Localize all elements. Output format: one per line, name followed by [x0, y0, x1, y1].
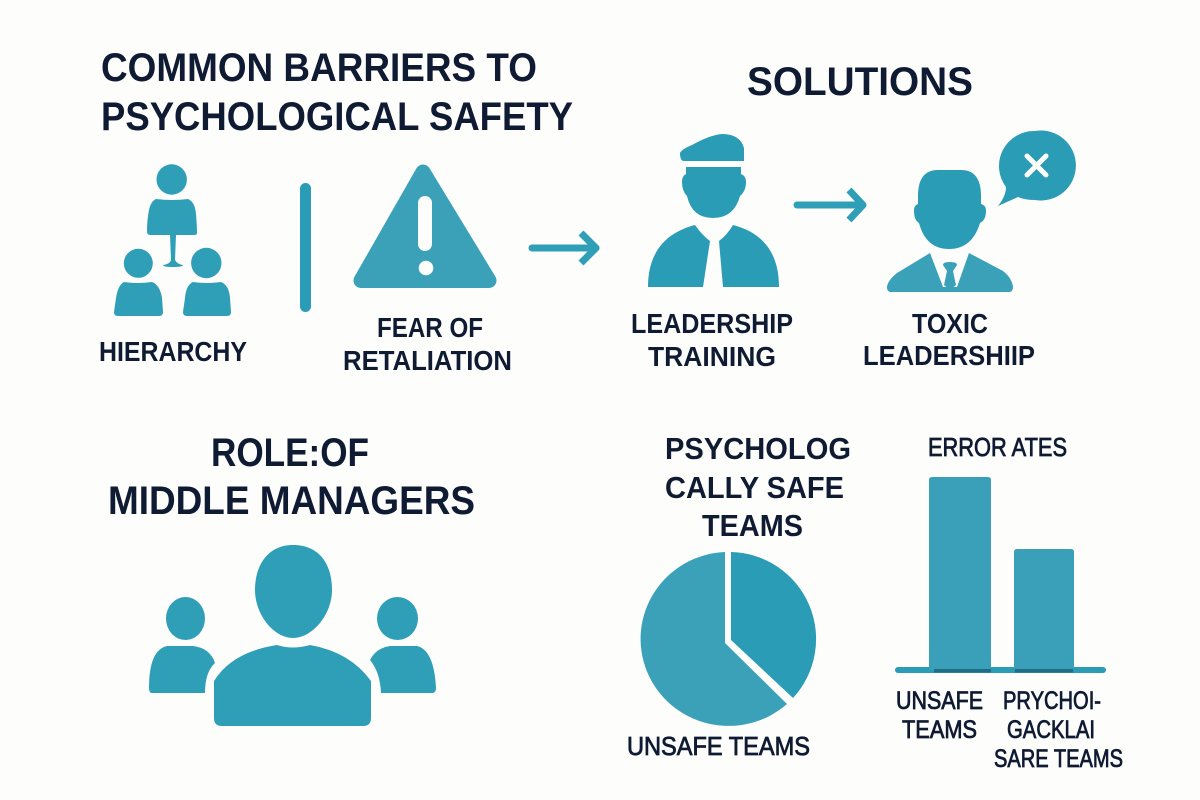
label: toxic leadership: [863, 308, 1035, 371]
arrow: barriers to training: [532, 233, 596, 263]
icon: toxic leader with speech bubble: [887, 130, 1076, 292]
heading: psychologically safe teams: TEAMS: [702, 508, 803, 543]
heading: role of middle managers: [108, 431, 475, 523]
bar labels: UNSAFE: [896, 687, 983, 715]
icon: warning triangle: [361, 172, 489, 280]
icon: group of managers: [149, 545, 436, 726]
label: leadership training: TRAINING: [648, 341, 776, 372]
heading: solutions: SOLUTIONS: [747, 60, 973, 104]
bar labels: PRYCHOI-: [1003, 687, 1101, 715]
label: fear of retaliation: RETALIATION: [343, 345, 512, 376]
heading: common barriers: COMMON BARRIERS TO: [101, 46, 537, 90]
bar labels: SARE TEAMS: [994, 745, 1123, 773]
label: toxic leadership: LEADERSHIIP: [863, 340, 1035, 371]
label: leadership training: LEADERSHIP: [631, 308, 793, 339]
heading: psychologically safe teams: PSYCHOLOG: [665, 431, 851, 466]
heading: role of middle managers: MIDDLE MANAGERS: [108, 479, 475, 523]
heading: psychologically safe teams: CALLY SAFE: [665, 470, 844, 505]
label: fear of retaliation: FEAR OF: [377, 312, 483, 343]
bar chart: [895, 477, 1106, 673]
pie chart: [641, 552, 816, 726]
heading: common barriers: PSYCHOLOGICAL SAFETY: [101, 95, 573, 139]
label: unsafe teams: UNSAFE TEAMS: [627, 731, 810, 761]
bar labels: TEAMS: [902, 716, 977, 744]
bar labels: [896, 687, 1123, 773]
icon: hierarchy of people: [114, 164, 231, 316]
vertical divider bar: [300, 183, 311, 312]
label: toxic leadership: TOXIC: [912, 308, 988, 339]
label: leadership training: [631, 308, 793, 372]
arrow: training to toxic leadership: [797, 190, 863, 220]
bar labels: GACKLAI: [1007, 716, 1095, 744]
icon: leadership training person: [648, 134, 779, 287]
heading: role of middle managers: ROLE:OF: [211, 431, 369, 475]
label: hierarchy: HIERARCHY: [99, 336, 247, 367]
heading: common barriers: [101, 46, 573, 139]
label: fear of retaliation: [343, 312, 512, 376]
heading: error rates: ERROR ATES: [928, 432, 1067, 462]
heading: psychologically safe teams: [665, 431, 851, 543]
